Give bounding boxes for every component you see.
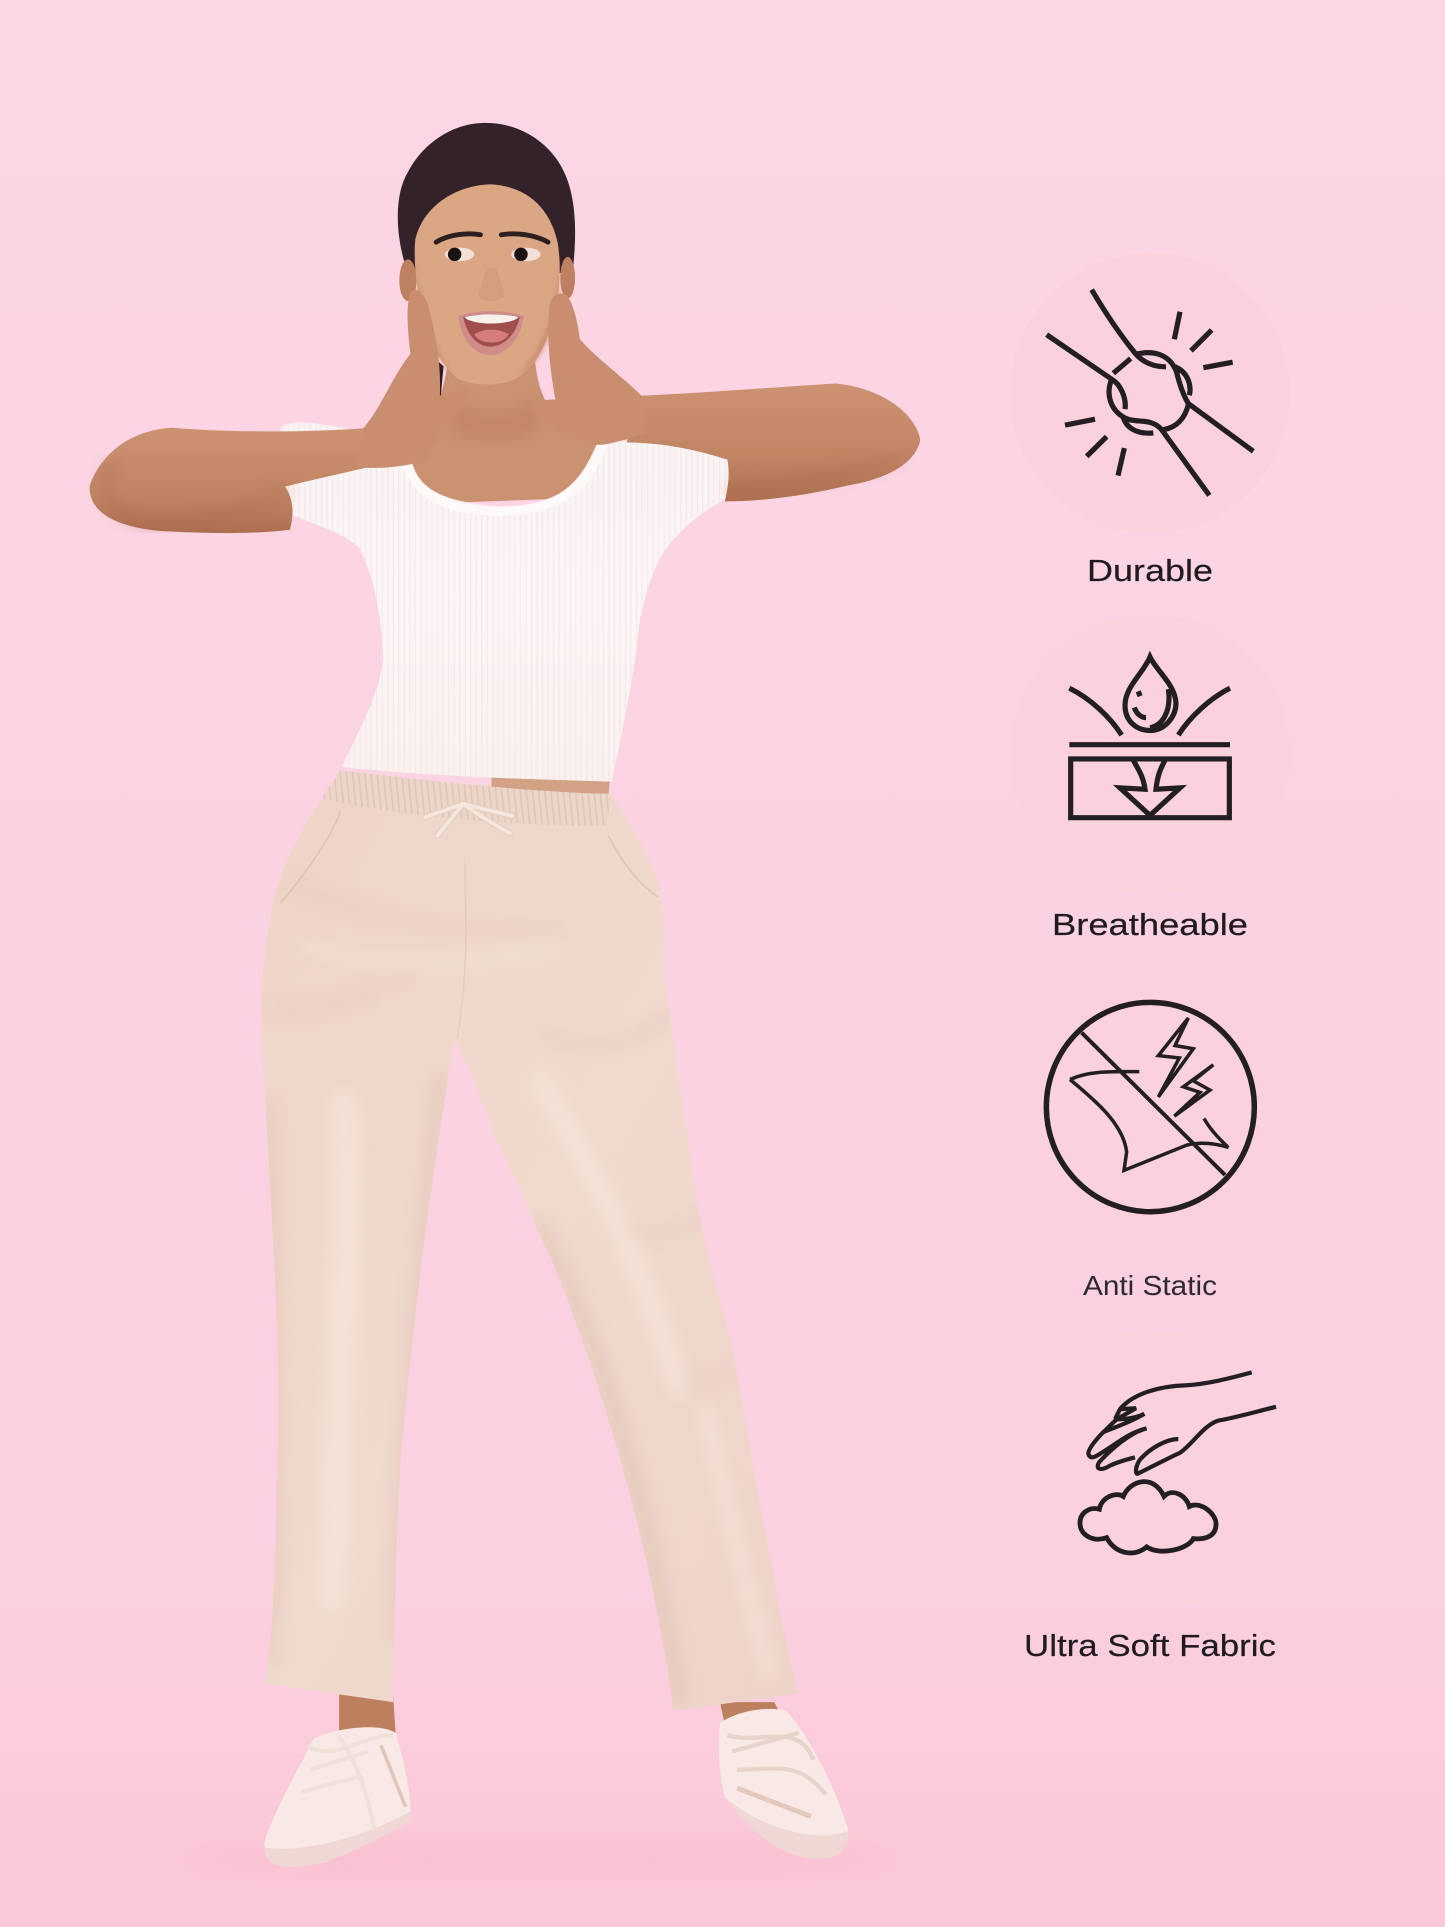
face and head [398,123,575,406]
eyebrows [436,234,548,242]
icon circle: breatheable [1010,615,1290,895]
panel: Anti Static [1010,968,1290,1301]
mouth [458,311,523,355]
ankles [339,1694,781,1740]
hand: left [356,290,470,468]
panel: Durable [1010,253,1290,588]
panel: Breatheable [1010,615,1290,942]
midriff [491,772,611,796]
label: Ultra Soft Fabric: Ultra Soft Fabric [1024,1628,1276,1663]
arm: left [90,428,371,533]
icon: water drop on breathable fabric [1069,657,1230,818]
nose [478,268,505,301]
label: Durable: Durable [1087,553,1213,588]
icon: crossed out static fabric [1046,1002,1254,1212]
eyes [445,248,474,261]
face shape [415,184,560,385]
right shoe [719,1709,848,1859]
hair [398,123,575,273]
dark hair strand [433,356,444,406]
ears [399,259,417,301]
photo: woman in white top and beige pants [90,123,920,1880]
pants shading folds [272,1080,769,1696]
beige pants [260,771,799,1711]
icon circle: durable [1010,253,1290,533]
hand: right [531,293,646,445]
icon circle: anti static [1010,968,1290,1248]
label: Anti Static: Anti Static [1083,1270,1217,1301]
panel: Ultra Soft Fabric [1010,1330,1290,1663]
icon: knotted threads [1047,290,1253,495]
floor shadow [172,1836,909,1880]
drawstring [425,804,512,836]
arm: right [627,383,920,501]
icon circle: ultra soft [1010,1330,1290,1610]
waistband [322,771,611,826]
icon: hand over cloud [1080,1372,1276,1553]
label: Breatheable: Breatheable [1052,907,1248,942]
white ribbed top [276,423,731,782]
left shoe [264,1727,411,1867]
chest and neck [405,356,602,504]
